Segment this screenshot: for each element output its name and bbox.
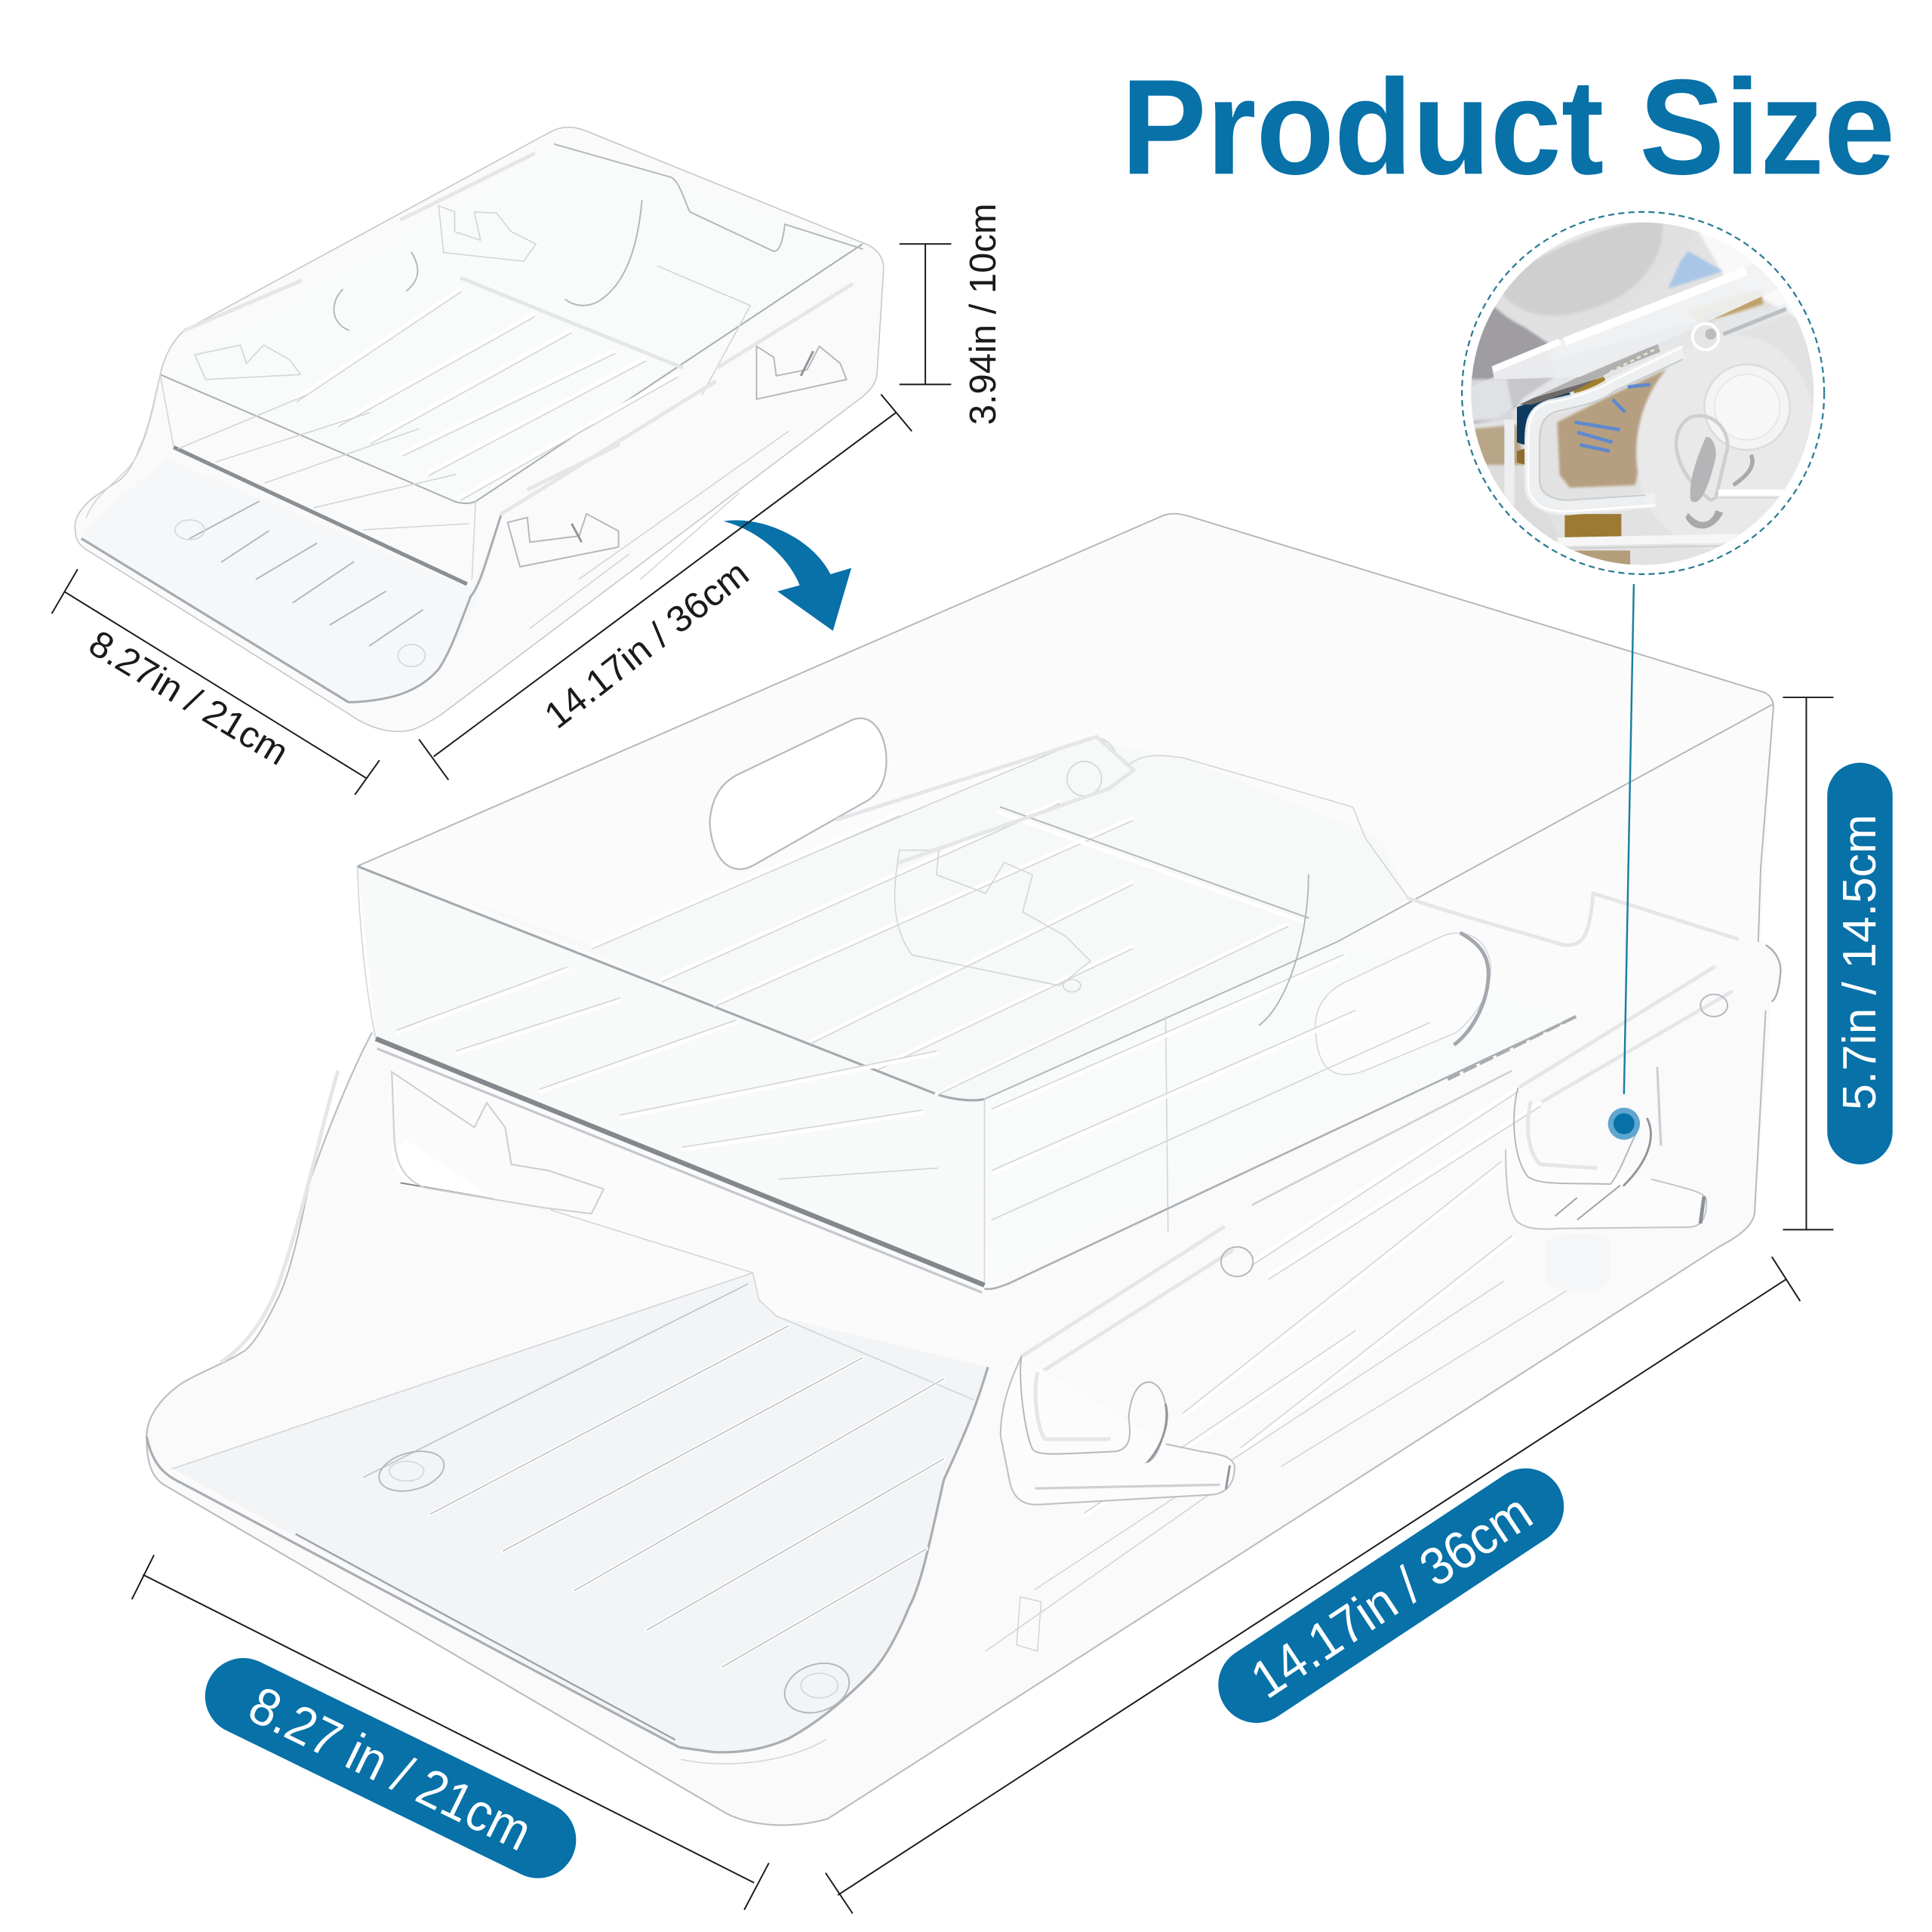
inner clip bbox=[895, 851, 1091, 986]
pill: 5.7in / 14.5cm: 5.7in / 14.5cm bbox=[1834, 814, 1886, 1110]
callout: zoomed detail circle bbox=[1462, 212, 1838, 574]
callout leader line and marker dot bbox=[1608, 584, 1640, 1140]
pill: 14.17in / 36cm: 14.17in / 36cm bbox=[1240, 1481, 1542, 1709]
handle cutout: right bbox=[1315, 933, 1491, 1075]
inner floor ribs bbox=[397, 801, 1429, 1220]
dimension: small height: 3.94in / 10cm bbox=[963, 203, 1004, 425]
arrow: small product to large product bbox=[723, 520, 851, 631]
dimension: small length: 14.17in / 36cm bbox=[537, 553, 756, 737]
large product: upper bin bbox=[357, 514, 1774, 1293]
dimension: large width bbox=[132, 1555, 769, 1910]
pill: 8.27 in / 21cm: 8.27 in / 21cm bbox=[240, 1675, 541, 1862]
front clip bbox=[1001, 1357, 1235, 1505]
bin front-left clip bbox=[392, 1072, 604, 1214]
dimension: small width: 8.27in / 21cm bbox=[82, 623, 295, 774]
right clip bbox=[1506, 1067, 1706, 1293]
dimension: small height bbox=[900, 203, 1004, 425]
title: Product Size bbox=[1121, 51, 1895, 203]
small product: stacked organizer photo bbox=[75, 128, 884, 731]
dimension: large height bbox=[1783, 697, 1893, 1229]
pill: 5.7in / 14.5cm bbox=[1827, 763, 1893, 1164]
pill: 8.27 in / 21cm bbox=[192, 1645, 589, 1891]
large product: lower tray bbox=[146, 941, 1781, 1825]
inner tray rim bbox=[592, 737, 1737, 946]
large product: side rails and clips bbox=[1001, 945, 1780, 1505]
foot buttons bbox=[374, 1444, 856, 1721]
handle cutout: left bbox=[709, 718, 886, 869]
dimension: large length bbox=[826, 1257, 1800, 1914]
dimension: small width bbox=[52, 569, 380, 795]
dimension: small length bbox=[419, 394, 912, 780]
floor ribs bbox=[364, 1162, 1601, 1667]
